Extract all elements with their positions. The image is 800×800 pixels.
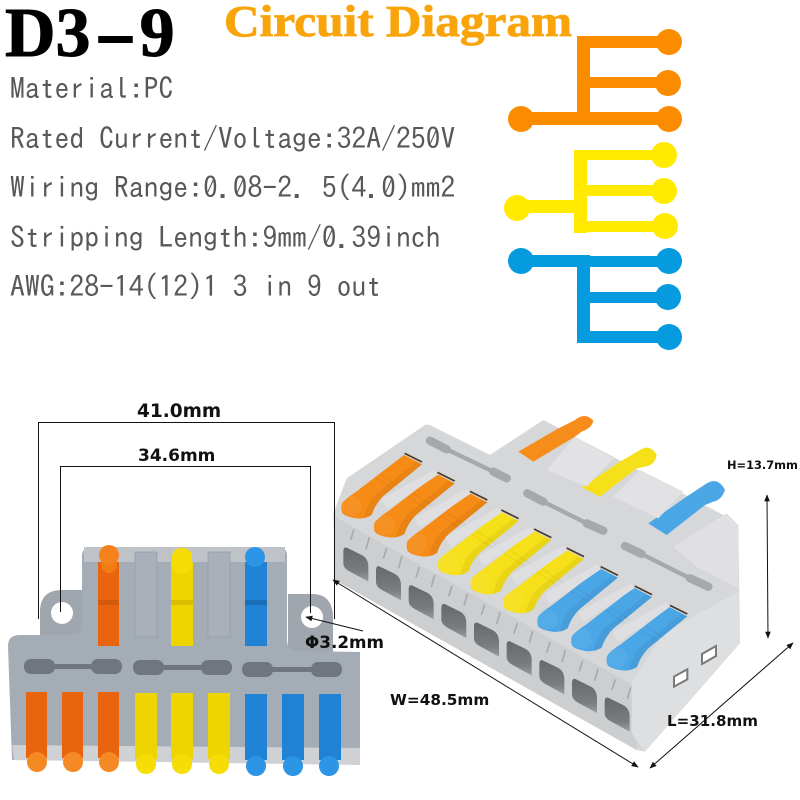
- specifications text block: Rated Current/Voltage:32A/250V: [10, 123, 455, 153]
- dimension: length: L=31.8mm: [667, 712, 758, 730]
- dimension: width: W=48.5mm: [390, 691, 489, 709]
- dimension bracket: 41.0mm: 41.0mm: [137, 401, 221, 422]
- separator strips: [382, 470, 669, 641]
- top levers: [98, 545, 267, 646]
- circuit diagram: orange line: [508, 29, 682, 132]
- top slots: [430, 441, 708, 587]
- specifications text block: Material:PC: [10, 73, 173, 103]
- rear levers: [518, 416, 725, 535]
- mounting holes: [51, 602, 73, 624]
- dimension bracket: 41.0mm: [38, 401, 334, 619]
- dimension: height: H=13.7mm: [727, 458, 798, 472]
- dimension: length: [650, 643, 793, 768]
- callout: hole diameter: Φ3.2mm: [305, 632, 384, 652]
- front view connector: [8, 545, 360, 776]
- callout: hole diameter: [305, 617, 384, 652]
- body silhouette: [333, 420, 740, 752]
- specifications text block: [10, 73, 455, 301]
- dimension bracket: 34.6mm: 34.6mm: [138, 446, 215, 466]
- mounting ears: [40, 590, 333, 654]
- circuit diagram: yellow line: [504, 142, 678, 239]
- perspective view connector: [333, 416, 740, 752]
- wire slots: [24, 659, 342, 677]
- divider panels: [135, 552, 230, 637]
- bottom levers: [26, 692, 341, 776]
- front levers: yellow: [438, 512, 584, 613]
- circuit diagram: blue line: [508, 248, 682, 350]
- lower body: [8, 620, 360, 763]
- front levers: orange: [341, 455, 487, 557]
- wire entry holes: [343, 547, 630, 732]
- specifications text block: Wiring Range:0.08-2. 5(4.0)mm2: [10, 172, 455, 202]
- specifications text block: AWG:28-14(12)1 3 in 9 out: [10, 271, 381, 301]
- dimension: width: [333, 580, 638, 767]
- upper body: [82, 547, 287, 642]
- front wall ribs: [351, 529, 631, 699]
- slot shadows: [405, 453, 687, 614]
- side clip holes: [674, 646, 716, 687]
- front levers: blue: [537, 568, 687, 671]
- rear lever cover panels: [547, 437, 683, 518]
- side wall: [632, 592, 740, 752]
- dimension bracket: 34.6mm: [60, 446, 310, 613]
- front wall: [335, 517, 638, 750]
- specifications text block: Stripping Length:9mm/0.39inch: [10, 222, 440, 252]
